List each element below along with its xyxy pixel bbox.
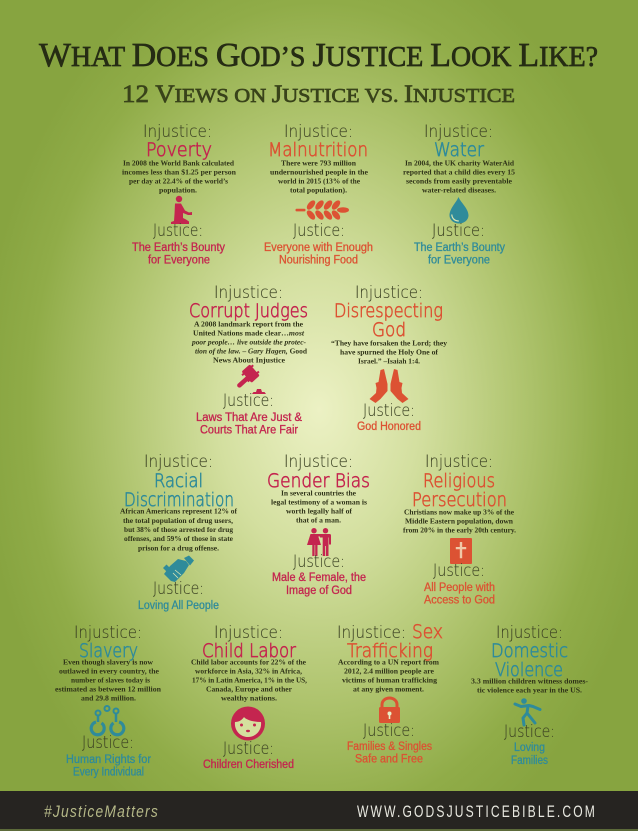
heading: disrespecting god: Disrespecting	[334, 300, 443, 322]
text block: child labor fact: Child labor accounts for 22% of the	[191, 658, 307, 666]
justice label: Justice:	[223, 739, 274, 759]
text block: corrupt judges fact: poor people… live outside the protec-	[191, 338, 307, 346]
heading: racial discrimination: Racial	[154, 470, 203, 492]
text block: gender fact: worth legally half of	[286, 506, 353, 516]
panel: gender bias	[267, 452, 370, 597]
text block: malnutrition fact: There were 793 million	[281, 158, 356, 168]
text block: scripture quote: Israel.” –Isaiah 1:4.	[358, 356, 420, 366]
heading: child labor: Child Labor	[202, 640, 296, 662]
injustice label: Injustice:	[284, 452, 353, 472]
panel: poverty	[122, 122, 236, 266]
icon: handcuffs	[91, 706, 124, 735]
justice text: Loving All People	[138, 600, 219, 612]
heading: domestic violence: Violence	[495, 659, 563, 681]
text block: poverty fact: per day at 22.4% of the world’s	[129, 176, 228, 186]
justice text	[414, 242, 505, 266]
text block: slavery fact: number of slaves today is	[71, 676, 150, 684]
text block: poverty fact: In 2008 the World Bank calculated	[123, 158, 235, 168]
icon: padlock	[379, 698, 400, 723]
justice text: All People with	[424, 582, 495, 594]
text block: slavery fact: and 29.8 million.	[81, 694, 136, 702]
injustice label: Injustice:	[143, 122, 212, 142]
panel: racial discrimination	[120, 452, 238, 612]
text block: domestic violence fact	[471, 676, 589, 694]
text block: persecution fact: Middle Eastern population, down	[405, 516, 513, 526]
icon: kneeling person	[171, 196, 192, 224]
text block: child labor fact: Canada, Europe and other	[206, 684, 293, 694]
injustice label: Injustice:	[355, 283, 423, 303]
icon: wheat	[296, 199, 349, 221]
text block: child labor fact: workforce in Asia, 32% in Africa,	[195, 666, 302, 676]
text block: racial fact: African Americans represent 12% of	[120, 506, 238, 516]
panel: child labor	[191, 623, 307, 771]
justice text	[264, 242, 373, 266]
text block: trafficking fact: According to a UN report from	[338, 658, 440, 666]
text block: corrupt judges fact: tion of the law. – Gary Hagen, Good	[195, 346, 308, 356]
justice label: Justice:	[363, 401, 415, 421]
injustice label: Injustice:	[424, 122, 493, 142]
justice label: Justice:	[432, 221, 485, 241]
justice text: The Earth’s Bounty	[414, 242, 505, 254]
justice label: Justice:	[82, 733, 134, 753]
justice text	[66, 754, 151, 778]
icon: bible	[450, 538, 472, 564]
heading: sex trafficking: Sex	[412, 621, 443, 643]
text block: racial fact: prison for a drug offense.	[138, 544, 219, 552]
justice text: Loving	[514, 742, 545, 754]
justice text: Human Rights for	[66, 754, 151, 766]
text block: racial fact: the total population of drug users,	[123, 516, 233, 525]
text block: poverty fact: population.	[159, 186, 197, 194]
text block: water fact: seconds from easily preventable	[406, 176, 513, 186]
text block: trafficking fact: 2012, 2.4 million people are	[344, 666, 435, 676]
text block: malnutrition fact: total population).	[290, 186, 347, 194]
justice text: Nourishing Food	[279, 254, 358, 266]
heading: disrespecting god	[334, 300, 443, 341]
text block: racial fact	[120, 506, 238, 552]
heading: water: Water	[434, 139, 484, 161]
text block: gender fact	[271, 488, 367, 524]
text block: persecution fact: Christians now make up 3% of the	[404, 508, 515, 516]
panel: sex trafficking	[337, 621, 443, 766]
panel: corrupt judges	[189, 283, 308, 436]
text block: persecution fact: from 20% in the early 20th century.	[403, 526, 516, 534]
panel: malnutrition	[264, 122, 373, 266]
heading: domestic violence: Domestic	[491, 640, 568, 662]
text block: trafficking fact: at any given moment.	[353, 684, 424, 694]
text block: gender fact: legal testimony of a woman is	[271, 498, 367, 506]
title: WHAT DOES GOD’S JUSTICE LOOK LIKE?	[39, 37, 598, 74]
text block: slavery fact: outlawed in every country, the	[59, 666, 160, 676]
justice text: Every Individual	[73, 766, 144, 778]
text block: racial fact: offenses, and 59% of those in state	[124, 534, 234, 543]
text block: corrupt judges fact	[191, 320, 308, 364]
panel: water	[403, 122, 515, 266]
injustice label: Injustice:	[284, 122, 353, 142]
justice text: Families & Singles	[347, 741, 432, 753]
injustice label: Injustice:	[74, 623, 142, 643]
text block: scripture quote: “They have forsaken the Lord; they	[331, 338, 447, 348]
heading: slavery: Slavery	[79, 640, 138, 662]
text block: trafficking fact: victims of human trafficking	[342, 676, 437, 684]
heading: disrespecting god: God	[372, 319, 406, 341]
icon: gavel	[232, 363, 266, 394]
heading: malnutrition: Malnutrition	[268, 139, 368, 161]
justice text	[196, 412, 302, 436]
heading: religious persecution	[412, 470, 507, 511]
justice text: Laws That Are Just &	[196, 412, 302, 424]
footer bar	[0, 791, 638, 831]
justice text: for Everyone	[148, 254, 210, 266]
justice text: Safe and Free	[355, 754, 423, 766]
justice text: Families	[511, 755, 548, 767]
justice label: Justice:	[293, 221, 345, 241]
justice text	[347, 741, 432, 766]
panel: domestic violence	[471, 623, 589, 767]
text block: gender fact: that of a man.	[296, 516, 341, 524]
injustice label: Injustice:	[214, 623, 283, 643]
justice text: Courts That Are Fair	[200, 424, 298, 436]
icon: water drop	[450, 197, 468, 224]
justice label: Justice:	[293, 552, 345, 572]
heading: poverty: Poverty	[146, 139, 212, 161]
justice text	[511, 742, 548, 767]
panel: slavery	[55, 623, 161, 778]
text block: corrupt judges fact: United Nations made clear… most	[193, 328, 305, 338]
text block: child labor fact: 17% in Latin America, 1% in the US,	[192, 676, 307, 684]
justice text: The Earth’s Bounty	[132, 242, 225, 254]
injustice label: Injustice:	[214, 283, 283, 303]
injustice label: Injustice:	[425, 452, 493, 472]
heading: religious persecution: Religious	[423, 470, 495, 492]
text block: slavery fact: Even though slavery is now	[63, 658, 154, 666]
justice label: Justice:	[433, 561, 485, 581]
heading: corrupt judges: Corrupt Judges	[189, 300, 308, 322]
heading: religious persecution: Persecution	[412, 489, 507, 511]
justice label: Justice:	[363, 721, 415, 741]
heading: domestic violence	[491, 640, 568, 681]
text block: scripture quote	[331, 338, 447, 366]
text block: racial fact: but 38% of those arrested for drug	[124, 525, 233, 534]
justice text: for Everyone	[428, 254, 490, 266]
text block: water fact: In 2004, the UK charity WaterAid	[405, 158, 515, 168]
text block: poverty fact	[122, 158, 236, 194]
justice text	[132, 242, 225, 266]
text block: domestic violence fact: tic violence each year in the US.	[477, 686, 582, 694]
icon: man and woman	[307, 528, 331, 556]
text block: water fact: reported that a child dies every 15	[403, 168, 515, 176]
text block: trafficking fact	[338, 658, 440, 694]
justice text: Everyone with Enough	[264, 242, 373, 254]
heading: racial discrimination: Discrimination	[124, 489, 234, 511]
text block: domestic violence fact: 3.3 million children witness domes-	[471, 676, 589, 686]
justice text: Image of God	[286, 585, 352, 597]
panel: religious persecution	[403, 452, 516, 606]
text block: corrupt judges fact: News About Injustice	[213, 356, 286, 364]
subtitle: 12 VIEWS ON JUSTICE VS. INJUSTICE	[122, 81, 515, 108]
text block: poverty fact: incomes less than $1.25 per person	[122, 168, 236, 176]
text block: gender fact: In several countries the	[281, 488, 357, 498]
text block: slavery fact: estimated as between 12 million	[55, 684, 161, 694]
justice text: Access to God	[424, 594, 495, 606]
panel: disrespecting god	[331, 283, 447, 433]
justice text	[272, 572, 366, 597]
text block: malnutrition fact	[270, 158, 369, 194]
justice label: Justice:	[153, 221, 203, 241]
heading: sex trafficking	[347, 621, 443, 662]
icon: child face	[231, 706, 265, 740]
justice label: Justice:	[504, 722, 555, 742]
injustice label: Injustice:	[496, 623, 563, 643]
icon: running figure	[515, 698, 540, 725]
text block: persecution fact	[403, 508, 516, 534]
justice label: Justice:	[223, 391, 274, 411]
text block: malnutrition fact: world in 2015 (13% of the	[278, 176, 361, 186]
icon: praying hands	[370, 369, 408, 403]
justice text	[424, 582, 495, 606]
text block: water fact	[403, 158, 515, 194]
text block: malnutrition fact: undernourished people in the	[270, 168, 369, 176]
icon: handshake	[163, 556, 194, 582]
hashtag: #JusticeMatters	[44, 802, 159, 821]
heading: gender bias: Gender Bias	[267, 470, 370, 492]
injustice label: Injustice:	[337, 623, 406, 643]
text block: water fact: water-related diseases.	[422, 186, 496, 194]
text block: child labor fact: wealthy nations.	[221, 694, 277, 702]
heading: racial discrimination	[124, 470, 234, 511]
justice text: Children Cherished	[203, 759, 294, 771]
text block: child labor fact	[191, 658, 307, 702]
justice label: Justice:	[153, 579, 204, 599]
justice text: God Honored	[357, 421, 421, 433]
injustice label: Injustice:	[144, 452, 213, 472]
justice text: Male & Female, the	[272, 572, 366, 584]
text block: scripture quote: have spurned the Holy One of	[340, 348, 439, 356]
heading: sex trafficking: Trafficking	[347, 640, 433, 662]
text block: corrupt judges fact: A 2008 landmark report from the	[194, 320, 304, 328]
text block: slavery fact	[55, 658, 161, 702]
